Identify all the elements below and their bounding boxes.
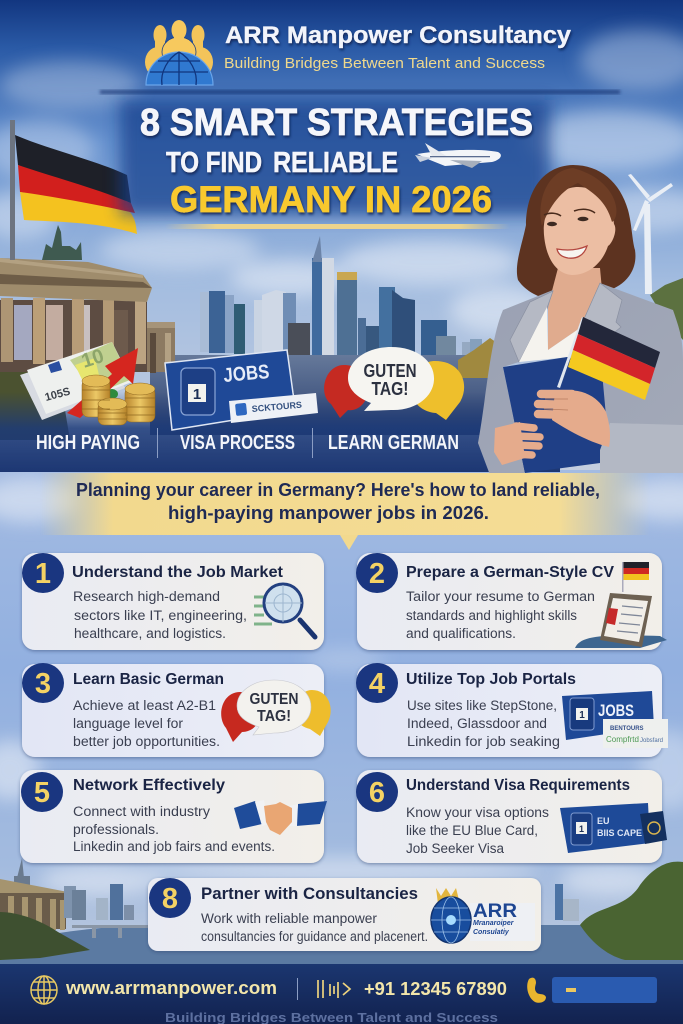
icon: money and coins: 105S (44, 386, 72, 404)
title backdrop (100, 90, 620, 215)
number 2: 2 (369, 558, 385, 590)
icon: jobs portal card: JOBS (598, 701, 634, 720)
panel: step 6 (356, 770, 667, 863)
panel: step 4 (356, 663, 668, 757)
contact button (552, 977, 657, 1003)
heading 6: Understand Visa Requirements (406, 777, 630, 794)
number 8: 8 (162, 883, 178, 915)
left shoreline trees (0, 360, 70, 440)
body 1: Research high-demand (73, 589, 220, 604)
phone number: +91 12345 67890 (364, 979, 507, 999)
blouse (519, 307, 580, 362)
label: high paying: HIGH PAYING (36, 432, 140, 454)
panel: step 2 (356, 553, 667, 650)
logo (145, 20, 213, 85)
icon: EU blue card and passport: BIIS CAPE (597, 828, 642, 838)
body 4 (407, 698, 560, 749)
headline line 2b: RELIABLE (273, 147, 398, 179)
icon: phone (527, 978, 546, 1003)
hand left (494, 422, 540, 465)
wind turbine (628, 174, 673, 294)
background: lower sky panel (0, 470, 683, 964)
number 4 (356, 663, 398, 703)
body 8 (201, 911, 428, 944)
lapels (510, 283, 622, 362)
icon: small speech bubbles: TAG! (257, 708, 291, 725)
body 6: like the EU Blue Card, (406, 823, 538, 838)
body 3: better job opportunities. (73, 734, 220, 749)
woman (478, 165, 683, 475)
right sleeve (600, 423, 683, 473)
header name: ARR Manpower Consultancy (225, 22, 572, 49)
body 4: Indeed, Glassdoor and (407, 716, 547, 731)
hand right (538, 390, 610, 447)
body 2 (406, 589, 595, 641)
body 3: language level for (73, 716, 184, 731)
number 5 (21, 772, 63, 812)
right trees behind woman (650, 278, 683, 340)
number 1: 1 (35, 558, 51, 590)
website: www.arrmanpower.com (65, 978, 277, 998)
number 1 (22, 553, 64, 593)
icon: magnifier (254, 584, 315, 637)
body 8: consultancies for guidance and placenert. (201, 929, 428, 944)
icon: speech bubbles: GUTEN (364, 361, 416, 381)
body 5: professionals. (73, 822, 159, 837)
body 6: Know your visa options (406, 805, 549, 820)
headline line 3: GERMANY IN 2026 (170, 179, 492, 220)
skyline: Frankfurt towers (200, 236, 482, 365)
fringe (540, 168, 617, 226)
body 4: Use sites like StepStone, (407, 698, 557, 713)
heading 5: Network Effectively (73, 777, 225, 794)
body 8: Work with reliable manpower (201, 911, 378, 926)
icon: ARR logo badge: Consulatiy (473, 929, 510, 936)
icon: jobs portal card: BENTOURS (610, 726, 644, 732)
dark band behind labels (0, 392, 560, 472)
number 3 (22, 663, 64, 703)
icon: EU blue card and passport (560, 803, 667, 853)
scenery: bottom left colonnade (0, 858, 68, 930)
neck and chest (548, 268, 602, 350)
icon: money and coins (20, 342, 155, 425)
icon: small speech bubbles (221, 680, 331, 742)
Brandenburg Gate (0, 225, 175, 373)
number 6 (356, 772, 398, 812)
panel: step 1 (22, 553, 324, 650)
headline line 1: 8 SMART STRATEGIES (140, 102, 533, 144)
background: clouds (0, 30, 683, 334)
icon: jobs card: 1 (193, 386, 201, 403)
icon: handshake (234, 800, 327, 835)
icon: left flagpole (10, 120, 15, 260)
scenery: distant city (64, 884, 579, 921)
heading 1: Understand the Job Market (72, 564, 283, 581)
scenery: left trees and shore (0, 912, 90, 960)
panel: step 3 (22, 663, 331, 757)
icon: jobs portal card: Jobsfard (640, 738, 663, 744)
number 4: 4 (369, 668, 385, 700)
body 4: Linkedin for job seaking (407, 734, 560, 749)
icon: globe (31, 976, 57, 1004)
river behind the icons (150, 355, 490, 435)
icon: EU blue card and passport: 1 (579, 824, 584, 834)
icon: jobs card: SCKTOURS (251, 400, 302, 414)
headline line 2a: TO FIND (166, 147, 262, 179)
hair back (517, 165, 635, 300)
header tagline: Building Bridges Between Talent and Success (224, 55, 545, 72)
body 2: and qualifications. (406, 626, 516, 641)
flag pole small (557, 317, 584, 388)
heading 3: Learn Basic German (73, 671, 224, 688)
body 3: Achieve at least A2-B1 (73, 698, 216, 713)
icon: German flag left (15, 135, 137, 234)
trees right of skyline (458, 338, 500, 378)
body 5 (73, 804, 275, 854)
body 5: Linkedin and job fairs and events. (73, 839, 275, 854)
body 1 (73, 589, 247, 641)
heading 2: Prepare a German-Style CV (406, 564, 615, 581)
body 2: Tailor your resume to German (406, 589, 595, 604)
scenery: bridge (72, 925, 148, 938)
icon: ARR logo badge: Mranaroiper (473, 920, 515, 927)
icon: small flag (622, 562, 649, 592)
icon: small speech bubbles: GUTEN (250, 691, 298, 708)
body 1: sectors like IT, engineering, (74, 608, 247, 623)
icon: jobs portal card (562, 691, 668, 748)
number 3: 3 (35, 668, 51, 700)
icon: CV clipboard (575, 593, 667, 648)
background: sky (0, 0, 683, 475)
icon: EU blue card and passport: EU (597, 816, 610, 826)
icon: airplane (415, 143, 501, 168)
footer bar (0, 964, 683, 1024)
icon: jobs portal card: Compfrtd (606, 735, 639, 744)
number 6: 6 (369, 777, 385, 809)
intro line 2: high-paying manpower jobs in 2026. (168, 503, 489, 523)
panel: step 8 (148, 878, 541, 951)
face (544, 187, 615, 275)
icon: ARR logo badge: ARR (473, 901, 517, 922)
scenery: river (0, 925, 683, 964)
intro line 1: Planning your career in Germany? Here's how to land reliable, (76, 480, 600, 500)
icon: speech bubbles (324, 347, 464, 420)
icon: jobs portal card: 1 (579, 710, 585, 721)
label: visa process: VISA PROCESS (180, 432, 295, 454)
body 1: healthcare, and logistics. (74, 626, 226, 641)
icon: jobs card: JOBS (223, 361, 270, 387)
flag right (568, 317, 660, 400)
icon: ARR logo badge (431, 888, 535, 943)
folder (503, 357, 606, 473)
heading 4: Utilize Top Job Portals (406, 671, 576, 688)
body 6 (406, 805, 549, 856)
icon: money and coins: 10 (79, 345, 107, 373)
scenery: right trees (580, 862, 683, 960)
icon: speech bubbles: TAG! (372, 379, 408, 399)
icon: jobs card (165, 350, 318, 430)
intro banner (40, 473, 650, 550)
icon: sound wave (318, 980, 350, 998)
heading 8: Partner with Consultancies (201, 884, 418, 903)
jacket (478, 283, 683, 475)
body 5: Connect with industry (73, 804, 210, 819)
number 2 (356, 553, 398, 593)
smile (557, 246, 587, 258)
label: learn german: LEARN GERMAN (328, 432, 459, 454)
title underline (165, 224, 510, 229)
number 8 (149, 878, 191, 918)
body 6: Job Seeker Visa (406, 841, 504, 856)
body 2: standards and highlight skills (406, 608, 577, 623)
number 5: 5 (34, 777, 50, 809)
panel: step 5 (20, 770, 327, 863)
background: lower clouds (0, 478, 683, 896)
body 3 (73, 698, 220, 749)
eyes and brows (544, 209, 595, 226)
